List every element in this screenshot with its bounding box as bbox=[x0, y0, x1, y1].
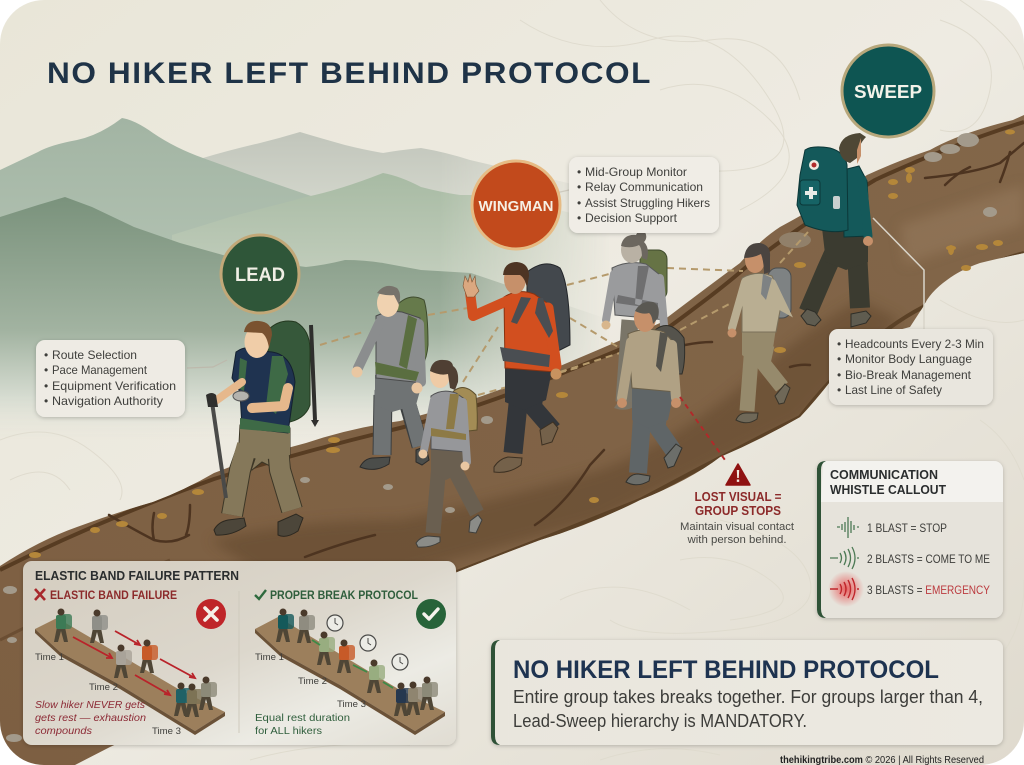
sub-panel: failure: Time 2 bbox=[89, 682, 118, 693]
panel: no hiker left behind summary: Lead-Sweep hierarchy is MANDATORY. bbox=[513, 710, 807, 731]
sub-panel: failure: Time 3 bbox=[152, 726, 181, 737]
callout: lost visual warning: GROUP STOPS bbox=[695, 504, 781, 518]
callout: wingman duties: • bbox=[577, 211, 581, 225]
title: NO HIKER LEFT BEHIND PROTOCOL bbox=[47, 57, 652, 90]
sub-panel: proper break: Time 2 bbox=[298, 676, 327, 687]
panel: communication whistle callout: WHISTLE CALLOUT bbox=[830, 483, 946, 497]
callout: lost visual warning: LOST VISUAL = bbox=[694, 490, 782, 504]
callout: lead duties: • bbox=[44, 348, 48, 362]
callout: lead duties bbox=[36, 340, 185, 417]
callout: sweep duties: • bbox=[837, 383, 841, 397]
hiker: woman mid-group bbox=[602, 231, 667, 410]
callout: wingman duties: • bbox=[577, 165, 581, 179]
sub-panel: proper break: Time 1 bbox=[255, 652, 284, 663]
sub-panel: failure: compounds bbox=[35, 725, 93, 737]
mountains backdrop bbox=[0, 118, 594, 418]
hiker: lead bbox=[206, 321, 319, 536]
hiker: woman tan pants bbox=[728, 243, 791, 423]
callout: lost visual warning: Maintain visual contact bbox=[680, 521, 794, 533]
panel: communication whistle callout: 3 BLASTS = EMERGENCY bbox=[867, 585, 990, 597]
callout: lead duties: Navigation Authority bbox=[52, 394, 163, 408]
panel: no hiker left behind summary: Entire group takes breaks together. For groups larger than 4, bbox=[513, 686, 983, 707]
callout: sweep duties: Last Line of Safety bbox=[845, 383, 942, 397]
callout: lead duties: Pace Management bbox=[52, 363, 148, 377]
sub-panel: failure: ELASTIC BAND FAILURE bbox=[50, 590, 177, 602]
callout: wingman duties bbox=[569, 157, 719, 233]
callout: wingman duties: • bbox=[577, 196, 581, 210]
callout: sweep duties: • bbox=[837, 368, 841, 382]
callout: sweep duties: Bio-Break Management bbox=[845, 368, 972, 382]
panel: no hiker left behind summary: NO HIKER LEFT BEHIND PROTOCOL bbox=[513, 656, 939, 684]
sub-panel: failure: Time 1 bbox=[35, 652, 64, 663]
panel: elastic band failure pattern bbox=[23, 561, 456, 745]
sub-panel: proper break: for ALL hikers bbox=[255, 725, 322, 737]
leader line: sweep callout bbox=[873, 218, 924, 329]
icon: warning triangle bbox=[726, 464, 750, 485]
callout: lead duties: • bbox=[44, 363, 48, 377]
hiker: tan shirt bbox=[617, 302, 685, 485]
sub-panel: failure: Slow hiker NEVER gets bbox=[35, 699, 146, 711]
sub-panel: failure: gets rest — exhaustion bbox=[35, 712, 146, 724]
panel: communication whistle callout: 1 BLAST = STOP bbox=[867, 523, 947, 535]
callout: sweep duties: • bbox=[837, 352, 841, 366]
callout: lead duties: Equipment Verification bbox=[52, 379, 176, 393]
sub-panel: proper break: PROPER BREAK PROTOCOL bbox=[270, 590, 418, 602]
callout: lost visual warning: with person behind. bbox=[686, 534, 786, 546]
panel: communication whistle callout: 2 BLASTS = COME TO ME bbox=[867, 554, 990, 566]
callout: lost visual warning bbox=[680, 464, 794, 546]
callout: sweep duties bbox=[829, 329, 993, 405]
badge: lead: LEAD bbox=[235, 265, 285, 286]
sub-panel: proper break: Time 3 bbox=[337, 699, 366, 710]
sub-panel: proper break bbox=[255, 590, 446, 737]
leader line: lead callout bbox=[187, 360, 227, 368]
callout: lead duties: • bbox=[44, 379, 48, 393]
connection dashed lines bbox=[320, 232, 808, 395]
sub-panel: failure bbox=[35, 589, 226, 737]
callout: wingman duties: Assist Struggling Hikers bbox=[585, 196, 710, 210]
hiker: wingman bbox=[463, 262, 570, 472]
hiker: gray backpacker bbox=[352, 286, 429, 469]
badge: lead bbox=[221, 235, 299, 313]
panel: communication whistle callout: COMMUNICATION bbox=[830, 468, 938, 482]
leader line: wingman callout bbox=[560, 190, 569, 193]
badge: wingman: WINGMAN bbox=[478, 199, 554, 215]
hiker: sweep bbox=[797, 133, 873, 327]
badge: wingman bbox=[472, 161, 560, 249]
icon: one blast bbox=[837, 517, 859, 538]
callout: sweep duties: • bbox=[837, 337, 841, 351]
sub-panel: proper break: Equal rest duration bbox=[255, 712, 350, 724]
heading: ELASTIC BAND FAILURE PATTERN bbox=[35, 568, 239, 583]
callout: sweep duties: Headcounts Every 2-3 Min bbox=[845, 337, 984, 351]
callout: wingman duties: • bbox=[577, 180, 581, 194]
hiker: woman with tan pack bbox=[416, 360, 482, 547]
callout: wingman duties: Mid-Group Monitor bbox=[585, 165, 687, 179]
icon: three blasts emergency bbox=[829, 572, 863, 606]
badge: sweep: SWEEP bbox=[854, 82, 922, 102]
badge: sweep bbox=[842, 45, 934, 137]
callout: wingman duties: Decision Support bbox=[585, 211, 678, 225]
lost visual red dashed line bbox=[680, 397, 725, 460]
panel: no hiker left behind summary bbox=[491, 640, 1003, 745]
callout: wingman duties: Relay Communication bbox=[585, 180, 703, 194]
callout: sweep duties: Monitor Body Language bbox=[845, 352, 972, 366]
icon: two blasts bbox=[830, 547, 859, 569]
panel: communication whistle callout bbox=[817, 461, 1003, 618]
callout: lead duties: • bbox=[44, 394, 48, 408]
callout: lead duties: Route Selection bbox=[52, 348, 137, 362]
